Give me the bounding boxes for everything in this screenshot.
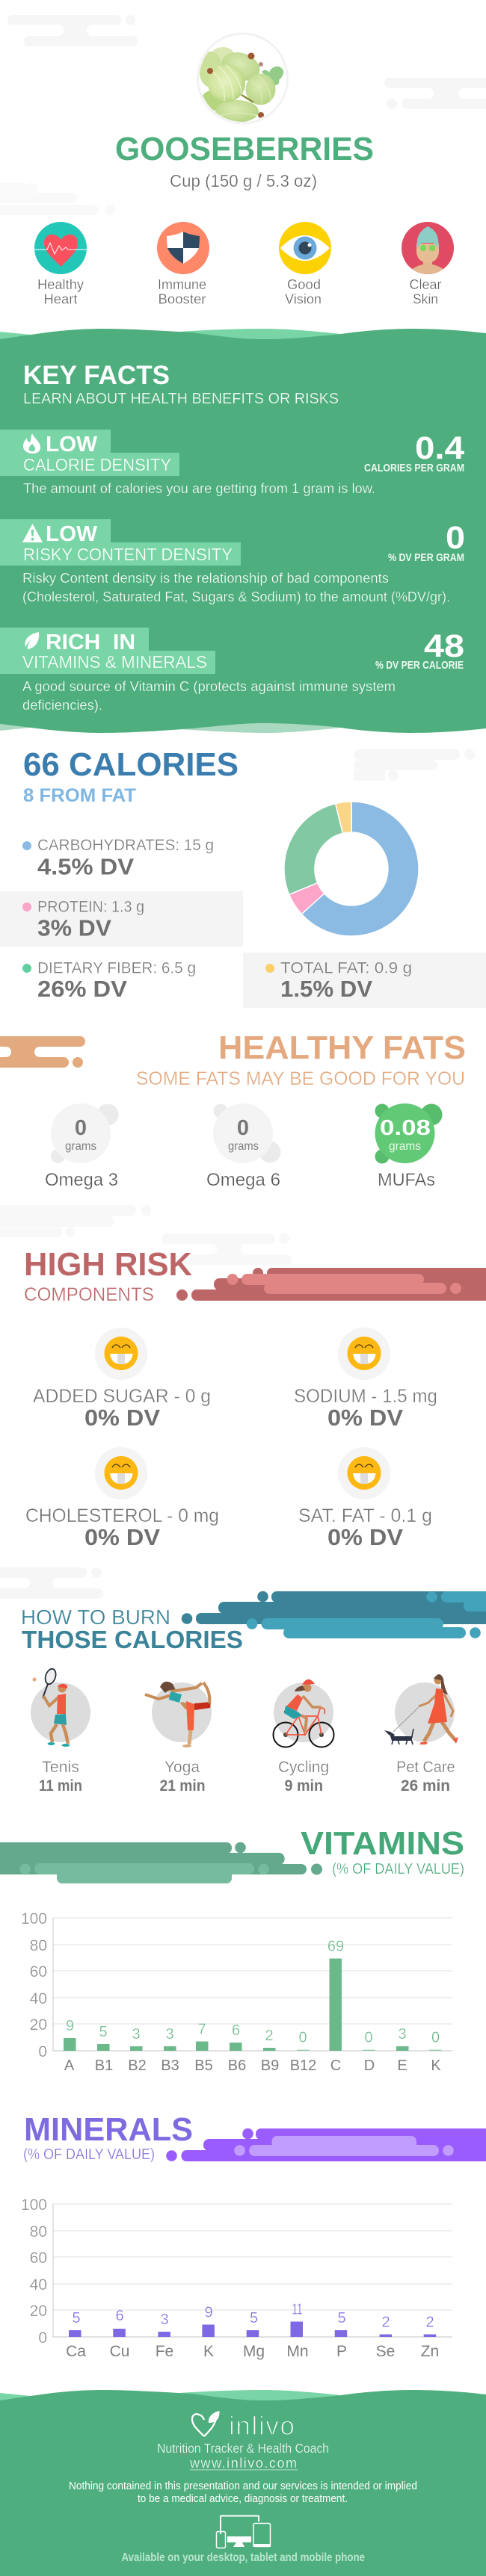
value: 0.4 bbox=[415, 430, 464, 466]
bar chart: minerals: 5 bbox=[72, 2310, 81, 2326]
description: The amount of calories you are getting from 1 gram is low. bbox=[23, 481, 375, 496]
bar chart: minerals: Mg bbox=[243, 2343, 265, 2360]
bar chart: vitamins: 6 bbox=[232, 2022, 240, 2039]
activity: cycling bbox=[274, 1679, 333, 1795]
bar chart: vitamins: 0 bbox=[298, 2029, 307, 2046]
description bbox=[22, 679, 396, 713]
metric name: CALORIE DENSITY bbox=[23, 455, 171, 474]
heading: minerals: MINERALS bbox=[24, 2112, 193, 2148]
unit: % DV PER GRAM bbox=[388, 551, 464, 564]
subheading: from fat: 8 FROM FAT bbox=[23, 785, 136, 806]
unit: % DV PER CALORIE bbox=[375, 659, 464, 672]
bar chart: minerals: Ca bbox=[66, 2343, 86, 2360]
heading: vitamins: VITAMINS bbox=[301, 1826, 464, 1862]
benefit icon: immune booster bbox=[157, 222, 209, 274]
website: www.inlivo.com bbox=[189, 2456, 297, 2471]
heading: those calories: THOSE CALORIES bbox=[22, 1626, 243, 1654]
bar chart: vitamins: B6 bbox=[228, 2058, 246, 2074]
activity: cycling: Cycling bbox=[278, 1759, 329, 1776]
mufas: MUFAs bbox=[378, 1170, 435, 1190]
bar chart: vitamins: 3 bbox=[132, 2026, 141, 2043]
subheading: (% OF DAILY VALUE) bbox=[332, 1861, 464, 1877]
activity: tennis: 11 min bbox=[39, 1777, 82, 1795]
bar chart: vitamins: E bbox=[397, 2058, 407, 2074]
bar chart: minerals: 5 bbox=[337, 2310, 346, 2326]
description: A good source of Vitamin C (protects against immune system bbox=[22, 679, 396, 694]
label: immune booster bbox=[158, 277, 206, 306]
subheading: components: COMPONENTS bbox=[24, 1284, 154, 1305]
legend: total fat: 1.5% DV bbox=[280, 976, 372, 1002]
omega 6: Omega 6 bbox=[206, 1170, 280, 1190]
panel: healthy fats bbox=[0, 1030, 466, 1190]
bar chart: vitamins: 69 bbox=[327, 1938, 344, 1954]
legend: protein: 3% DV bbox=[37, 915, 111, 941]
bar chart: vitamins: 0 bbox=[38, 2043, 47, 2061]
panel: vitamins bbox=[0, 1826, 464, 2074]
footer bbox=[0, 2390, 486, 2576]
bar chart: vitamins: 0 bbox=[364, 2029, 373, 2046]
bar chart: vitamins: 0 bbox=[431, 2029, 440, 2046]
bar chart: vitamins: 9 bbox=[66, 2018, 74, 2034]
label: good vision: Good bbox=[287, 277, 321, 292]
item: saturated fat: SAT. FAT - 0.1 g bbox=[298, 1505, 432, 1526]
subheading: (% OF DAILY VALUE) bbox=[23, 2146, 155, 2163]
decorative cloud: red bbox=[176, 1268, 486, 1301]
subheading: LEARN ABOUT HEALTH BENEFITS OR RISKS bbox=[23, 391, 339, 407]
benefit icon: clear skin bbox=[402, 222, 454, 274]
icon: devices bbox=[217, 2516, 271, 2548]
description: (Cholesterol, Saturated Fat, Sugars & Sodium) to the amount (%DV/gr). bbox=[22, 589, 450, 604]
item: cholesterol: 0% DV bbox=[84, 1524, 160, 1550]
legend: protein: PROTEIN: 1.3 g bbox=[37, 899, 144, 916]
bar chart: minerals: 80 bbox=[30, 2223, 47, 2241]
rating: RICH IN bbox=[46, 631, 135, 654]
bar chart: minerals: Fe bbox=[156, 2343, 173, 2360]
bar chart: minerals: 0 bbox=[38, 2329, 47, 2347]
benefit icon: good vision bbox=[279, 222, 331, 274]
heading: high risk: HIGH RISK bbox=[24, 1247, 193, 1283]
activity: yoga: Yoga bbox=[164, 1759, 200, 1776]
background cloud bbox=[354, 749, 475, 781]
bar chart: minerals: 6 bbox=[115, 2308, 124, 2324]
panel: burn calories bbox=[21, 1591, 486, 1795]
activity: yoga bbox=[145, 1682, 212, 1795]
bar chart: minerals: 9 bbox=[204, 2304, 213, 2320]
label: good vision: Vision bbox=[285, 291, 322, 306]
omega 6 bbox=[206, 1103, 281, 1190]
bar chart: vitamins: B2 bbox=[128, 2058, 147, 2074]
bar chart: vitamins: B3 bbox=[161, 2058, 179, 2074]
panel: high risk components bbox=[24, 1247, 486, 1550]
label: healthy heart: Healthy bbox=[37, 277, 84, 292]
item: added sugar bbox=[33, 1328, 211, 1431]
bar chart: minerals: 5 bbox=[250, 2310, 258, 2326]
bar chart: minerals: Cu bbox=[110, 2343, 129, 2360]
bar chart: vitamins: K bbox=[431, 2058, 441, 2074]
bar chart: minerals: 2 bbox=[381, 2315, 390, 2331]
label: immune booster: Booster bbox=[159, 291, 206, 306]
item: cholesterol: CHOLESTEROL - 0 mg bbox=[25, 1505, 219, 1526]
legend: carbohydrates bbox=[22, 837, 214, 880]
serving size: Cup (150 g / 5.3 oz) bbox=[170, 171, 317, 191]
donut chart bbox=[284, 802, 419, 936]
bar chart: vitamins: 100 bbox=[21, 1910, 47, 1928]
background cloud bbox=[0, 1567, 120, 1599]
label: healthy heart bbox=[37, 277, 84, 306]
legend: carbohydrates: 4.5% DV bbox=[37, 854, 134, 880]
availability note: Available on your desktop, tablet and mobile phone bbox=[122, 2551, 365, 2564]
legend: dietary fiber: 26% DV bbox=[37, 976, 127, 1002]
decorative cloud: green bbox=[0, 1842, 322, 1883]
bar chart: vitamins bbox=[21, 1910, 452, 2074]
background clouds bbox=[0, 15, 486, 215]
bar chart: minerals: 11 bbox=[292, 2301, 302, 2318]
bar chart: minerals: 2 bbox=[425, 2315, 434, 2331]
decorative cloud: purple bbox=[166, 2128, 486, 2161]
item: sodium: 0% DV bbox=[327, 1405, 403, 1431]
bar chart: vitamins: 7 bbox=[197, 2022, 206, 2038]
mufas: grams bbox=[389, 1140, 421, 1153]
disclaimer: Nothing contained in this presentation and our services is intended or implied bbox=[69, 2480, 417, 2492]
rating: LOW bbox=[46, 433, 98, 456]
bar chart: vitamins: 2 bbox=[265, 2028, 274, 2044]
item: added sugar: 0% DV bbox=[84, 1405, 160, 1431]
bar chart: vitamins: 80 bbox=[30, 1937, 47, 1954]
fact: risky content density bbox=[0, 519, 465, 604]
bar chart: minerals: P bbox=[336, 2343, 347, 2360]
omega 3: 0 bbox=[75, 1116, 87, 1140]
bar chart: minerals: 3 bbox=[160, 2312, 169, 2328]
bar chart: vitamins: 3 bbox=[398, 2026, 407, 2043]
panel: calories bbox=[0, 747, 486, 1008]
bar chart: minerals: Se bbox=[376, 2343, 395, 2360]
mufas bbox=[375, 1103, 443, 1190]
bar chart: vitamins: C bbox=[330, 2058, 341, 2074]
fact: calorie density bbox=[0, 430, 464, 496]
rating: LOW bbox=[46, 522, 98, 546]
item: cholesterol bbox=[25, 1447, 219, 1550]
omega 6: grams bbox=[228, 1140, 259, 1153]
bar chart: minerals: 60 bbox=[30, 2250, 47, 2267]
legend: total fat: TOTAL FAT: 0.9 g bbox=[280, 960, 412, 977]
bar chart: minerals: K bbox=[203, 2343, 214, 2360]
item: sodium: SODIUM - 1.5 mg bbox=[294, 1386, 437, 1407]
tagline: Nutrition Tracker & Health Coach bbox=[157, 2441, 329, 2456]
unit: CALORIES PER GRAM bbox=[364, 462, 464, 474]
icon: leaf bbox=[25, 632, 39, 649]
omega 3: grams bbox=[65, 1140, 96, 1153]
panel: minerals bbox=[21, 2112, 486, 2360]
bar chart: minerals: 100 bbox=[21, 2196, 47, 2214]
food photo: gooseberries bbox=[197, 34, 287, 123]
bar chart: minerals: 40 bbox=[30, 2276, 47, 2294]
omega 3 bbox=[45, 1103, 118, 1190]
disclaimer bbox=[69, 2480, 417, 2505]
label: immune booster: Immune bbox=[158, 277, 206, 292]
bar chart: vitamins: B1 bbox=[95, 2058, 113, 2074]
legend: carbohydrates: CARBOHYDRATES: 15 g bbox=[37, 837, 214, 854]
legend: total fat bbox=[243, 953, 486, 1008]
bar chart: minerals: Zn bbox=[421, 2343, 439, 2360]
bar chart: vitamins: 3 bbox=[165, 2026, 174, 2043]
heading: healthy fats: HEALTHY FATS bbox=[218, 1030, 466, 1066]
metric name: VITAMINS & MINERALS bbox=[22, 652, 207, 672]
logo: inlivo: inlivo bbox=[229, 2412, 295, 2441]
heading: how to burn: HOW TO BURN bbox=[21, 1606, 170, 1629]
panel: key facts bbox=[0, 329, 486, 733]
bar chart: vitamins: B12 bbox=[290, 2058, 316, 2074]
bar chart: vitamins: B5 bbox=[194, 2058, 213, 2074]
subheading: SOME FATS MAY BE GOOD FOR YOU bbox=[136, 1068, 465, 1089]
activity: cycling: 9 min bbox=[285, 1777, 323, 1795]
logo: inlivo bbox=[192, 2411, 295, 2441]
bar chart: vitamins: 5 bbox=[99, 2024, 108, 2040]
benefit icon: healthy heart bbox=[34, 222, 87, 274]
heading: key facts: KEY FACTS bbox=[23, 361, 170, 390]
decorative cloud: orange bbox=[0, 1036, 102, 1068]
omega 3: Omega 3 bbox=[45, 1170, 118, 1190]
label: clear skin: Clear bbox=[410, 277, 442, 292]
label: clear skin bbox=[410, 277, 442, 306]
legend: dietary fiber: DIETARY FIBER: 6.5 g bbox=[37, 960, 196, 977]
activity: tennis: Tenis bbox=[42, 1759, 79, 1776]
bar chart: vitamins: D bbox=[364, 2058, 375, 2074]
fact: rich in vitamins and minerals bbox=[0, 628, 464, 713]
label: healthy heart: Heart bbox=[43, 291, 78, 306]
bar chart: vitamins: A bbox=[64, 2058, 75, 2074]
heading: calories: 66 CALORIES bbox=[23, 747, 239, 783]
legend: dietary fiber bbox=[22, 960, 196, 1002]
activity: pet care: Pet Care bbox=[396, 1759, 455, 1776]
activity: pet care: 26 min bbox=[401, 1777, 450, 1795]
metric name: RISKY CONTENT DENSITY bbox=[23, 545, 233, 564]
activity: pet care bbox=[384, 1674, 458, 1795]
bar chart: vitamins: 40 bbox=[30, 1990, 47, 2007]
label: clear skin: Skin bbox=[413, 291, 438, 306]
mufas: 0.08 bbox=[380, 1116, 431, 1140]
activity: yoga: 21 min bbox=[160, 1777, 205, 1795]
omega 6: 0 bbox=[237, 1116, 249, 1140]
value: 48 bbox=[424, 628, 464, 664]
disclaimer: to be a medical advice, diagnosis or treatment. bbox=[138, 2492, 348, 2505]
item: saturated fat bbox=[298, 1447, 432, 1550]
bar chart: minerals bbox=[21, 2196, 452, 2360]
item: saturated fat: 0% DV bbox=[327, 1524, 403, 1550]
item: added sugar: ADDED SUGAR - 0 g bbox=[33, 1386, 211, 1407]
bar chart: minerals: 20 bbox=[30, 2303, 47, 2320]
activity: tennis bbox=[31, 1668, 90, 1795]
bar chart: vitamins: 60 bbox=[30, 1963, 47, 1981]
legend: protein bbox=[0, 891, 243, 947]
icon: flame bbox=[23, 433, 40, 453]
background clouds bbox=[0, 1205, 308, 1265]
item: sodium bbox=[294, 1328, 437, 1431]
icon: warning bbox=[22, 524, 43, 542]
bar chart: vitamins: B9 bbox=[261, 2058, 279, 2074]
bar chart: minerals: Mn bbox=[286, 2343, 309, 2360]
description: deficiencies). bbox=[22, 698, 102, 713]
value: 0 bbox=[446, 520, 465, 556]
bar chart: vitamins: 20 bbox=[30, 2016, 47, 2034]
decorative cloud: teal bbox=[182, 1591, 486, 1638]
description: Risky Content density is the relationship of bad components bbox=[22, 571, 389, 586]
description bbox=[22, 571, 450, 604]
title: GOOSEBERRIES bbox=[115, 131, 374, 167]
label: good vision bbox=[285, 277, 322, 306]
